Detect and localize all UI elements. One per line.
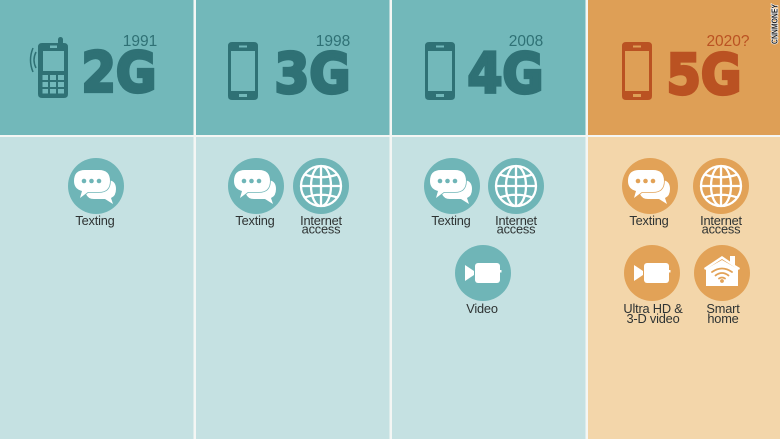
heading: 5G: 5G [666,42,742,106]
feature: video: Video [466,301,498,316]
column: 4G [392,0,586,439]
body panel: 3G [196,137,390,439]
feature: ultra HD and 3-D video: Ultra HD & [623,301,683,316]
feature: texting [68,158,124,228]
header panel: 4G [392,0,586,135]
feature: internet access: access [302,222,340,236]
feature: texting [622,158,678,228]
year: 2020?: 2020? [706,33,750,50]
feature: texting: Texting [629,213,669,228]
feature: texting: Texting [75,213,115,228]
feature: texting: Texting [235,213,275,228]
column: 3G [196,0,390,439]
body panel: 5G [588,137,780,439]
column: 2G [0,0,194,439]
header panel: 2G [0,0,194,135]
icon: smartphone [622,42,652,100]
feature: internet access [293,158,349,236]
year: 2008: 2008 [509,33,543,50]
icon: smartphone [228,42,258,100]
body panel: 2G [0,137,194,439]
feature: video [455,245,511,316]
feature: internet access: access [702,222,740,236]
icon: feature phone [30,37,68,98]
header panel: 5G [588,0,780,135]
column: 5G [588,0,780,439]
heading: 2G: 2G [82,40,156,104]
feature: ultra HD and 3-D video: 3-D video [627,311,680,326]
year: 1998: 1998 [316,33,350,50]
feature: texting [424,158,480,228]
feature: internet access: Internet [700,213,743,228]
feature: smart home: Smart [706,301,740,316]
feature: smart home [694,245,750,326]
body panel: 4G [392,137,586,439]
feature: texting: Texting [431,213,471,228]
feature: ultra HD and 3-D video [623,245,683,326]
feature: internet access: Internet [300,213,343,228]
feature: texting [228,158,284,228]
feature: internet access: access [497,222,535,236]
feature: internet access [488,158,544,236]
header panel: 3G [196,0,390,135]
heading: 3G: 3G [274,42,350,106]
feature: smart home: home [707,311,739,326]
icon: smartphone [425,42,455,100]
year: 1991: 1991 [123,33,157,50]
feature: internet access: Internet [495,213,538,228]
feature: internet access [693,158,749,236]
heading: 4G: 4G [468,42,544,106]
